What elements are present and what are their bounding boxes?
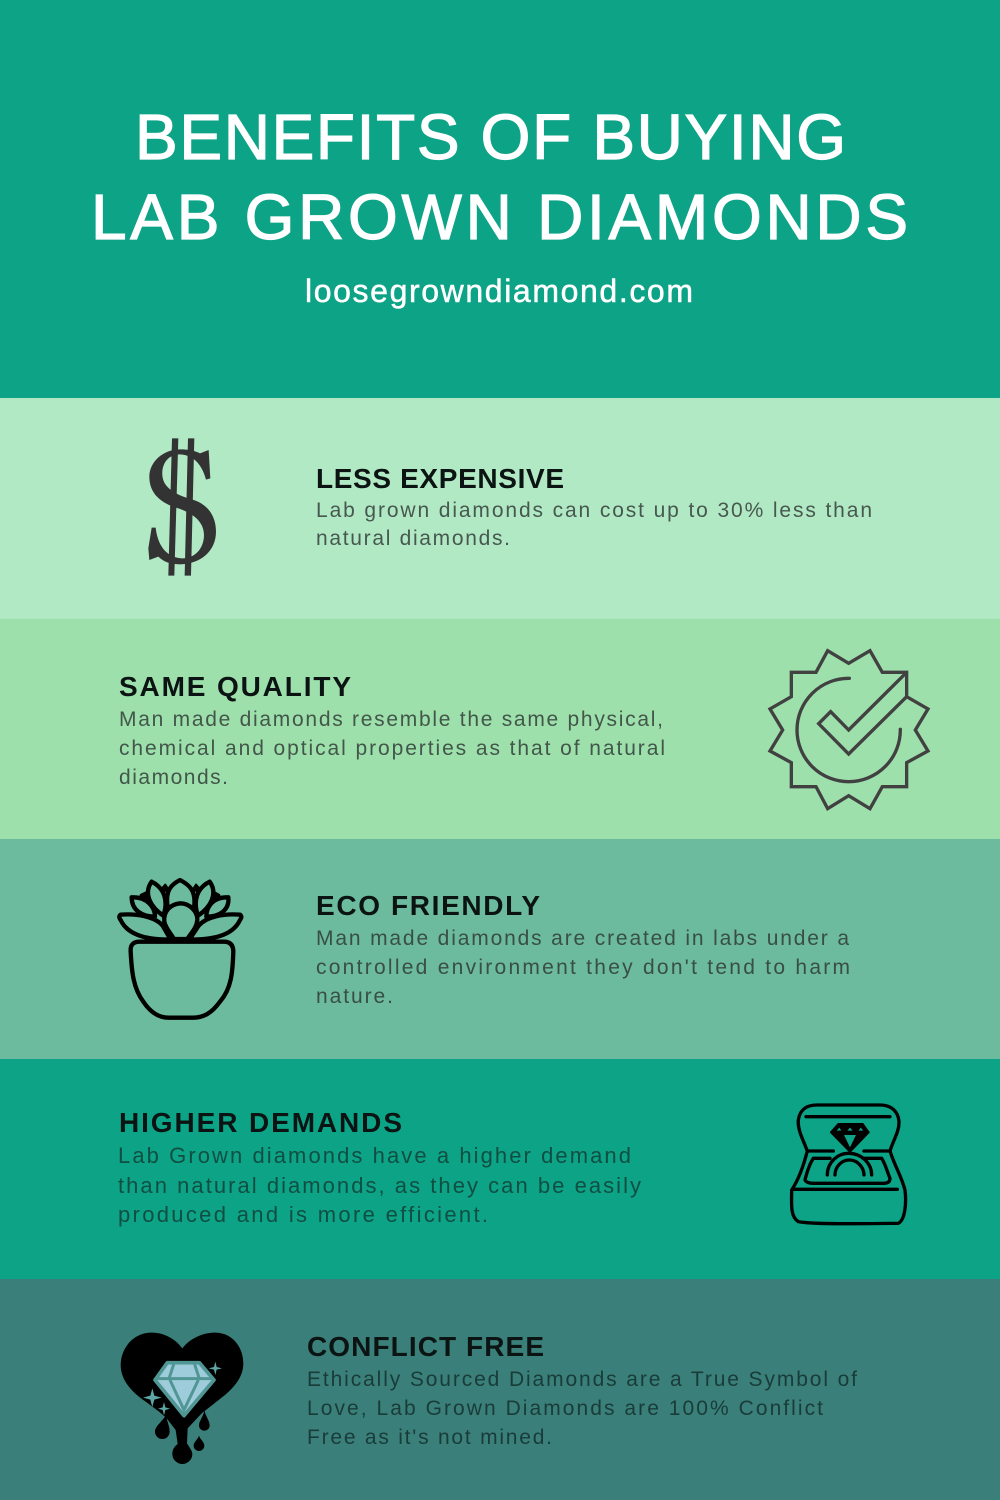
heading: SAME QUALITY <box>119 671 351 702</box>
body text: nature. <box>316 985 393 1008</box>
title: BENEFITS OF BUYING <box>135 101 846 173</box>
body text <box>118 1143 641 1227</box>
panel: conflict free <box>0 1279 1000 1500</box>
panel: less expensive <box>0 398 1000 619</box>
body text: Love, Lab Grown Diamonds are 100% Conflict <box>307 1397 823 1420</box>
icon: dripping heart with diamond <box>121 1333 243 1464</box>
icon: succulent plant in pot <box>119 880 241 1018</box>
body text: Man made diamonds are created in labs under a <box>316 927 849 950</box>
body text: Man made diamonds resemble the same physical, <box>119 708 663 731</box>
body text: Lab grown diamonds can cost up to 30% less than <box>316 499 872 522</box>
body text: chemical and optical properties as that of natural <box>119 737 665 760</box>
heading: HIGHER DEMANDS <box>119 1107 402 1138</box>
body text: produced and is more efficient. <box>118 1202 488 1227</box>
panel: eco friendly <box>0 839 1000 1059</box>
title <box>91 101 908 253</box>
body text: diamonds. <box>119 766 228 789</box>
icon: dollar sign <box>148 438 216 576</box>
body text <box>316 499 872 550</box>
header panel <box>0 0 1000 398</box>
body text: Lab Grown diamonds have a higher demand <box>118 1143 631 1168</box>
icon: quality badge with check mark <box>770 651 928 809</box>
body text <box>316 927 850 1008</box>
heading: ECO FRIENDLY <box>316 890 540 921</box>
body text: controlled environment they don't tend to harm <box>316 956 850 979</box>
title: LAB GROWN DIAMONDS <box>91 181 908 253</box>
body text: than natural diamonds, as they can be easily <box>118 1173 641 1198</box>
body text <box>119 708 665 789</box>
panel: higher demands <box>0 1059 1000 1279</box>
heading: LESS EXPENSIVE <box>316 463 564 494</box>
heading: CONFLICT FREE <box>307 1331 544 1362</box>
body text: natural diamonds. <box>316 527 510 550</box>
icon: ring in open box <box>792 1105 906 1224</box>
body text: Ethically Sourced Diamonds are a True Symbol of <box>307 1368 857 1391</box>
website url: loosegrowndiamond.com <box>305 273 693 309</box>
panel: same quality <box>0 619 1000 839</box>
body text: Free as it's not mined. <box>307 1426 552 1449</box>
body text <box>307 1368 857 1449</box>
